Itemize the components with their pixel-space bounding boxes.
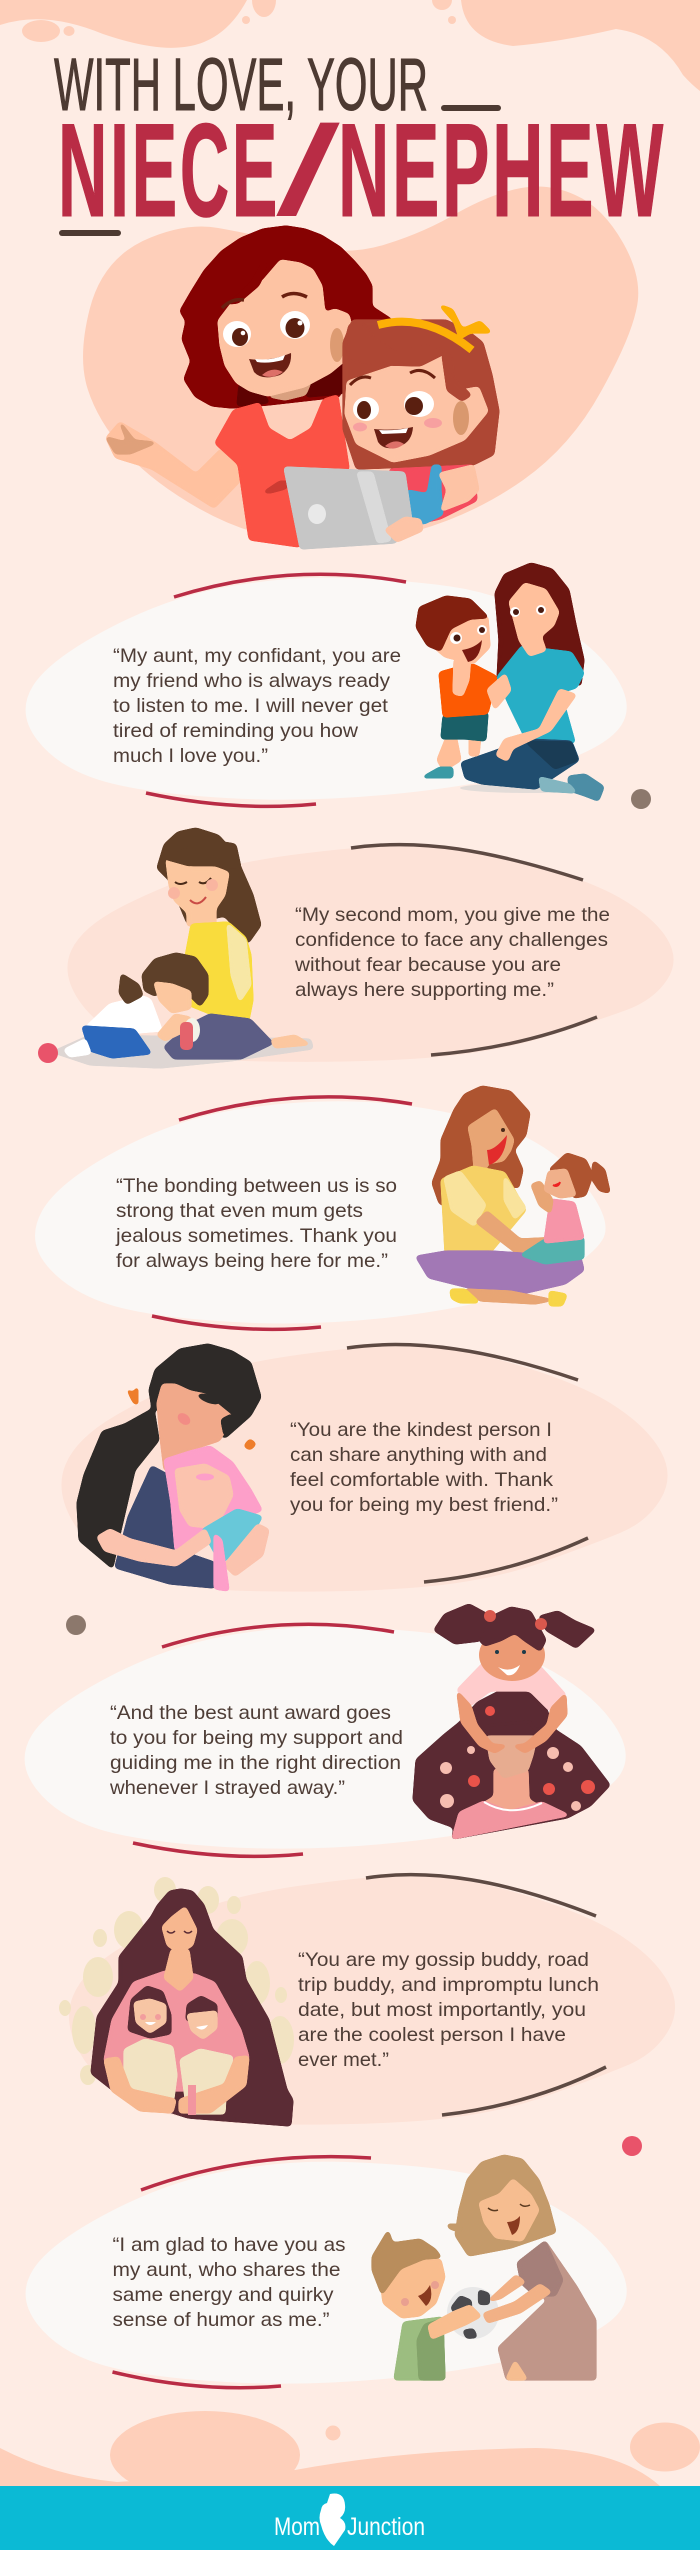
top arc — [351, 845, 583, 880]
top arc — [179, 1097, 412, 1120]
title line two: / — [278, 102, 338, 241]
top arc — [366, 1875, 596, 1916]
panel: quote 3 — [35, 1087, 609, 1329]
illustration: aunt with two children — [59, 1877, 294, 2125]
decorative top blobs — [0, 0, 700, 91]
quote text: feel comfortable with. Thank — [290, 1469, 553, 1491]
quote text — [298, 1949, 599, 2071]
hair flowers — [440, 1706, 595, 1811]
quote text: my aunt, who shares the — [112, 2259, 340, 2281]
top arc — [347, 1345, 578, 1380]
flower halo — [59, 1877, 294, 2085]
speech blob — [26, 578, 627, 800]
quote text: “I am glad to have you as — [112, 2234, 346, 2256]
panel: quote 7 — [26, 2136, 642, 2388]
accent dot — [622, 2136, 642, 2156]
panel: quote 2 — [38, 829, 674, 1067]
quote text: “And the best aunt award goes — [110, 1702, 391, 1724]
panel: quote 4 — [61, 1345, 668, 1592]
speech blob — [67, 845, 674, 1062]
quote text: “The bonding between us is so — [116, 1175, 397, 1197]
niece headband — [378, 306, 490, 350]
quote text — [294, 904, 610, 1001]
bottom arc — [112, 2372, 281, 2388]
quote text — [115, 1175, 397, 1272]
quote text: “My second mom, you give me the — [295, 904, 610, 926]
accent dot — [38, 1043, 58, 1063]
panel: quote 5 — [25, 1605, 626, 1856]
heart-shaped hero blob — [83, 187, 638, 544]
speech blob — [35, 1101, 606, 1323]
quote text: jealous sometimes. Thank you — [115, 1225, 397, 1247]
quote text: “You are my gossip buddy, road — [298, 1949, 589, 1971]
bottom arc — [133, 1843, 303, 1856]
illustration: aunt and niece with tablet — [107, 227, 498, 548]
quote text: without fear because you are — [294, 954, 561, 976]
quote text: my friend who is always ready — [113, 670, 390, 692]
soccer ball patches — [450, 2289, 490, 2339]
top arc — [141, 2157, 371, 2190]
bottom arc — [152, 1316, 321, 1329]
quote text: always here supporting me.” — [295, 979, 554, 1001]
quote text: for always being here for me.” — [116, 1250, 388, 1272]
quote text: are the coolest person I have — [298, 2024, 566, 2046]
title line two: NIECE — [58, 97, 280, 245]
accent dot — [66, 1615, 86, 1635]
aunt face details — [222, 294, 344, 377]
logo wordmark: Mom — [274, 2513, 320, 2541]
quote text: strong that even mum gets — [116, 1200, 363, 1222]
quote text: ever met.” — [298, 2049, 389, 2071]
top arc — [162, 1624, 394, 1647]
quote text: guiding me in the right direction — [110, 1752, 401, 1774]
quote text: “My aunt, my confidant, you are — [113, 645, 401, 667]
decorative bottom blobs — [0, 2411, 700, 2499]
quote text: whenever I strayed away.” — [109, 1777, 345, 1799]
quote text: tired of reminding you how — [113, 720, 359, 742]
quote text — [109, 1702, 403, 1799]
quote text — [113, 645, 401, 767]
illustration: niece on aunt's shoulders — [414, 1605, 609, 1838]
illustration: boy whispering to aunt — [417, 564, 603, 800]
panel: quote 6 — [59, 1875, 675, 2125]
quote text: trip buddy, and impromptu lunch — [298, 1974, 599, 1996]
quote text: much I love you.” — [113, 745, 268, 767]
bottom arc — [146, 793, 316, 806]
quote text: sense of humor as me.” — [112, 2309, 330, 2331]
speech blob — [61, 1345, 668, 1592]
speech blob — [69, 1875, 675, 2125]
title line one: WITH LOVE, YOUR — [54, 43, 428, 126]
bottom arc — [424, 1538, 588, 1582]
illustration: aunt holding toddler — [417, 1087, 609, 1305]
top arc — [174, 574, 406, 597]
bottom arc — [431, 1017, 597, 1055]
quote text: “You are the kindest person I — [290, 1419, 552, 1441]
speech blob — [26, 2162, 627, 2384]
title — [54, 43, 666, 245]
quote text — [112, 2234, 346, 2331]
speech blob — [25, 1627, 626, 1849]
logo icon — [320, 2493, 345, 2546]
logo: MomJunction — [274, 2493, 425, 2546]
illustration: aunt and boy with soccer ball — [373, 2156, 595, 2379]
quote text: to you for being my support and — [110, 1727, 403, 1749]
footer band — [0, 2486, 700, 2550]
accent dot — [631, 789, 651, 809]
panel: quote 1 — [26, 564, 651, 809]
quote text: confidence to face any challenges — [295, 929, 608, 951]
quote text: can share anything with and — [290, 1444, 547, 1466]
niece face details — [350, 370, 469, 449]
title blank dash — [441, 105, 501, 111]
quote text: same energy and quirky — [112, 2284, 334, 2306]
quote text: you for being my best friend.” — [290, 1494, 558, 1516]
illustration: child bowing to aunt — [54, 829, 312, 1067]
quote text: to listen to me. I will never get — [113, 695, 389, 717]
title underline dash — [59, 230, 121, 236]
quote text: date, but most importantly, you — [298, 1999, 586, 2021]
illustration: aunt hugging niece — [78, 1345, 268, 1590]
logo: MomJunction: Junction — [347, 2513, 425, 2541]
bottom arc — [442, 2067, 606, 2115]
quote text — [290, 1419, 558, 1516]
